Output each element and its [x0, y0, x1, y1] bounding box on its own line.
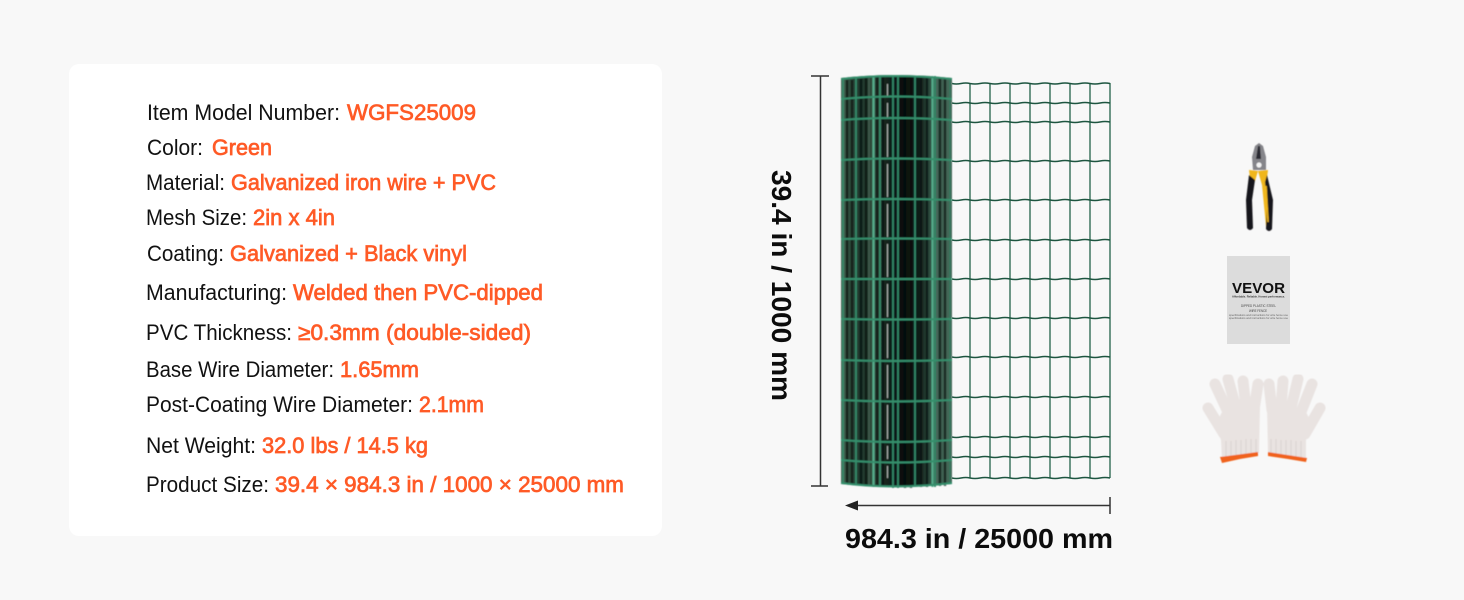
spec: material: Galvanized iron wire + PVC	[231, 170, 496, 195]
spec: base wire diameter: 1.65mm	[340, 357, 419, 382]
spec: color: Green	[212, 135, 272, 160]
spec: color: Color:	[147, 135, 203, 160]
height label: 39.4 in / 1000 mm	[766, 170, 797, 401]
spec: item model number: WGFS25009	[347, 100, 476, 125]
manual tagline: Affordable. Reliable. Honest performance.	[1232, 294, 1285, 298]
spec: item model number: Item Model Number:	[147, 100, 340, 125]
rolled wire mesh	[841, 75, 952, 488]
unrolled wire mesh	[952, 83, 1110, 479]
spec: color	[147, 135, 272, 160]
manual fine print: specifications and instructions for wire fence use	[1229, 314, 1289, 317]
spec: coating: Coating:	[147, 241, 224, 266]
spec: mesh size: Mesh Size:	[146, 205, 247, 230]
spec: product size: Product Size:	[146, 472, 269, 497]
width label: 984.3 in / 25000 mm	[845, 523, 1113, 554]
spec: post-coating wire diameter: 2.1mm	[419, 392, 484, 417]
icon: pliers	[1246, 143, 1273, 231]
spec: manufacturing	[146, 280, 543, 305]
manual fine print: specifications and instructions for wire fence use	[1229, 317, 1289, 320]
manual subtitle: WIRE FENCE	[1249, 309, 1267, 313]
spec: coating: Galvanized + Black vinyl	[230, 241, 467, 266]
spec: material: Material:	[146, 170, 225, 195]
icon: work gloves	[1208, 379, 1320, 463]
manual fine print	[1229, 314, 1289, 320]
spec: mesh size	[146, 205, 335, 230]
manual booklet	[1227, 256, 1290, 344]
spec: post-coating wire diameter: Post-Coating Wire Diameter:	[146, 392, 413, 417]
left glove	[1208, 379, 1260, 463]
spec: mesh size: 2in x 4in	[253, 205, 335, 230]
spec: pvc thickness: PVC Thickness:	[146, 320, 292, 345]
spec: manufacturing: Manufacturing:	[146, 280, 287, 305]
spec: net weight	[146, 433, 428, 458]
spec: product size: 39.4 × 984.3 in / 1000 × 25000 mm	[275, 472, 624, 497]
manual title: DIPPED PLASTIC STEEL	[1241, 304, 1276, 308]
panel: specifications	[69, 64, 662, 536]
spec: manufacturing: Welded then PVC-dipped	[293, 280, 543, 305]
right glove	[1267, 379, 1320, 462]
width dimension arrow	[845, 497, 1110, 514]
spec: net weight: 32.0 lbs / 14.5 kg	[262, 433, 428, 458]
spec: base wire diameter: Base Wire Diameter:	[146, 357, 334, 382]
spec: pvc thickness	[146, 320, 531, 345]
spec: net weight: Net Weight:	[146, 433, 256, 458]
spec: pvc thickness: ≥0.3mm (double-sided)	[298, 320, 531, 345]
manual logo: VEVOR	[1232, 280, 1285, 297]
spec: item model number	[147, 100, 476, 125]
height dimension line	[811, 76, 829, 486]
